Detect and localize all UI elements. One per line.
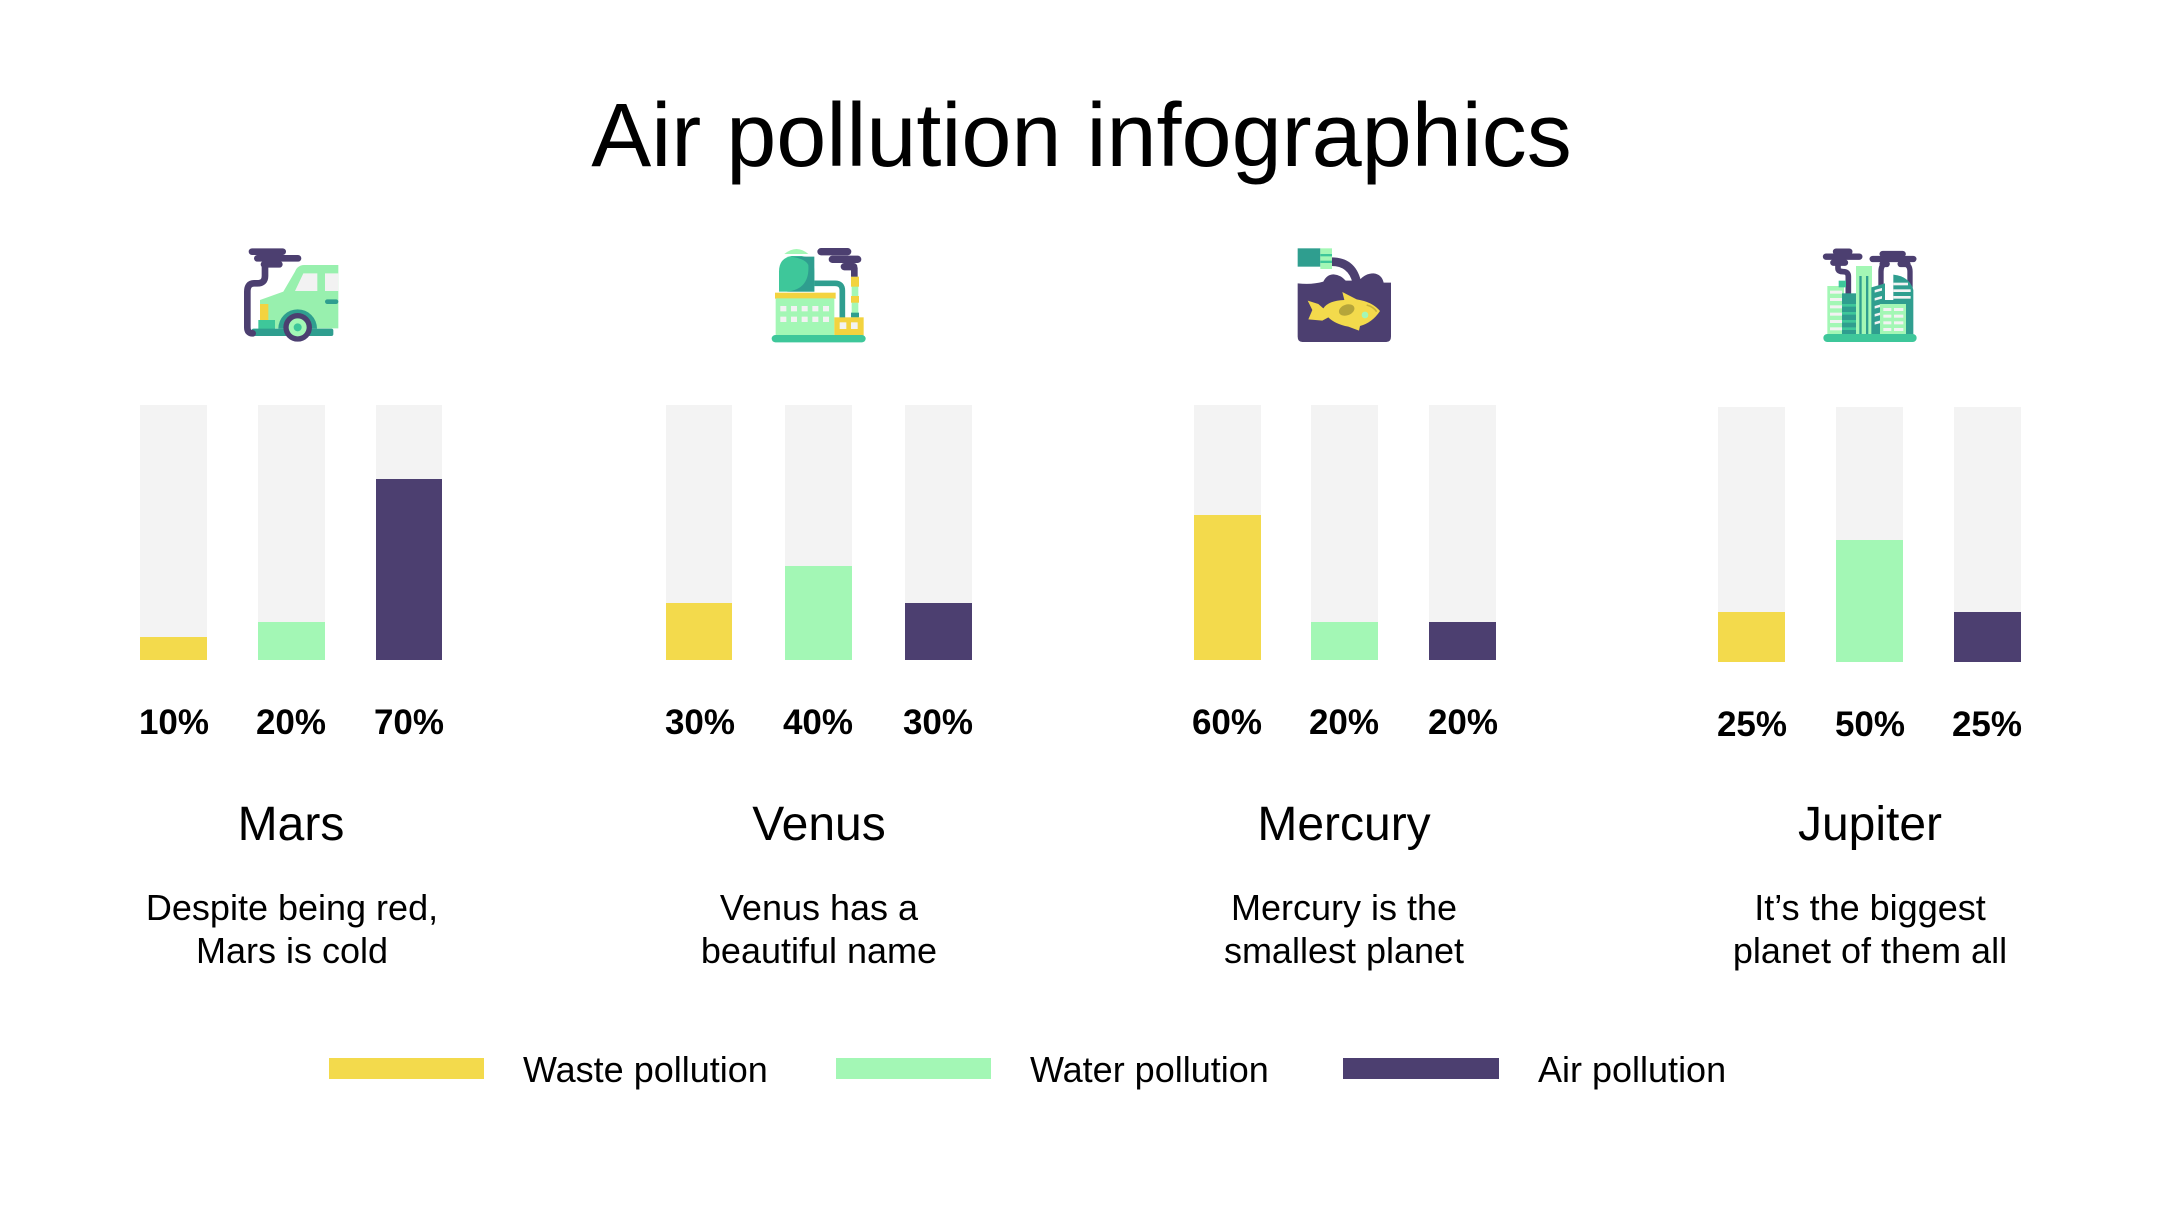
title: Air pollution infographics bbox=[591, 86, 1572, 186]
text: Mars description: Mars is cold bbox=[196, 930, 388, 971]
text: Mercury description: Mercury is the bbox=[1231, 887, 1457, 928]
heading: Venus: Venus bbox=[752, 798, 886, 851]
bar: water 20% bbox=[258, 405, 325, 660]
value: Mercury waste: 60% bbox=[1192, 703, 1262, 742]
text: Mars description bbox=[146, 887, 438, 971]
text: Jupiter description: planet of them all bbox=[1733, 930, 2007, 971]
value: Venus air: 30% bbox=[903, 703, 973, 742]
legend swatch: waste bbox=[329, 1058, 484, 1079]
text: Mercury description: smallest planet bbox=[1224, 930, 1464, 971]
value: Venus waste: 30% bbox=[665, 703, 735, 742]
value: Venus water: 40% bbox=[783, 703, 853, 742]
heading: Jupiter: Jupiter bbox=[1798, 798, 1942, 851]
bar: water 40% bbox=[785, 405, 852, 660]
text: Mercury description bbox=[1224, 887, 1464, 971]
heading: Mercury: Mercury bbox=[1257, 798, 1431, 851]
value: Mercury air: 20% bbox=[1428, 703, 1498, 742]
bar: air 25% bbox=[1954, 407, 2021, 662]
icon: city with smog bbox=[1822, 248, 1917, 342]
text: Venus description: beautiful name bbox=[701, 930, 937, 971]
value: Mars water: 20% bbox=[256, 703, 326, 742]
text: Venus description: Venus has a bbox=[720, 887, 918, 928]
bar: waste 60% bbox=[1194, 405, 1261, 660]
value: Mercury water: 20% bbox=[1309, 703, 1379, 742]
icon: car with exhaust bbox=[244, 248, 338, 342]
legend label: waste: Waste pollution bbox=[523, 1049, 768, 1090]
bar: waste 10% bbox=[140, 405, 207, 660]
text: Jupiter description bbox=[1733, 887, 2007, 971]
text: Venus description bbox=[701, 887, 937, 971]
value: Mars air: 70% bbox=[374, 703, 444, 742]
legend swatch: air bbox=[1343, 1058, 1499, 1079]
panel: Mercury bbox=[1194, 248, 1496, 660]
icon: polluted water with fish bbox=[1298, 248, 1391, 342]
legend swatch: water bbox=[836, 1058, 991, 1079]
value: Jupiter water: 50% bbox=[1835, 705, 1905, 744]
value: Jupiter waste: 25% bbox=[1717, 705, 1787, 744]
bar: waste 30% bbox=[666, 405, 732, 660]
value: Mars waste: 10% bbox=[139, 703, 209, 742]
legend label: water: Water pollution bbox=[1030, 1049, 1269, 1090]
value: Jupiter air: 25% bbox=[1952, 705, 2022, 744]
bar: water 20% bbox=[1311, 405, 1378, 660]
text: Mars description: Despite being red, bbox=[146, 887, 438, 928]
panel: Jupiter bbox=[1718, 248, 2021, 662]
icon: factory bbox=[772, 248, 866, 342]
legend bbox=[329, 1058, 1499, 1079]
text: Jupiter description: It’s the biggest bbox=[1754, 887, 1986, 928]
bar: air 70% bbox=[376, 405, 442, 660]
bar: air 20% bbox=[1429, 405, 1496, 660]
heading: Mars: Mars bbox=[238, 798, 344, 851]
bar: air 30% bbox=[905, 405, 972, 660]
panel: Venus bbox=[666, 248, 972, 660]
bar: waste 25% bbox=[1718, 407, 1785, 662]
legend label: air: Air pollution bbox=[1538, 1049, 1726, 1090]
panel: Mars bbox=[140, 248, 442, 660]
bar: water 50% bbox=[1836, 407, 1903, 662]
